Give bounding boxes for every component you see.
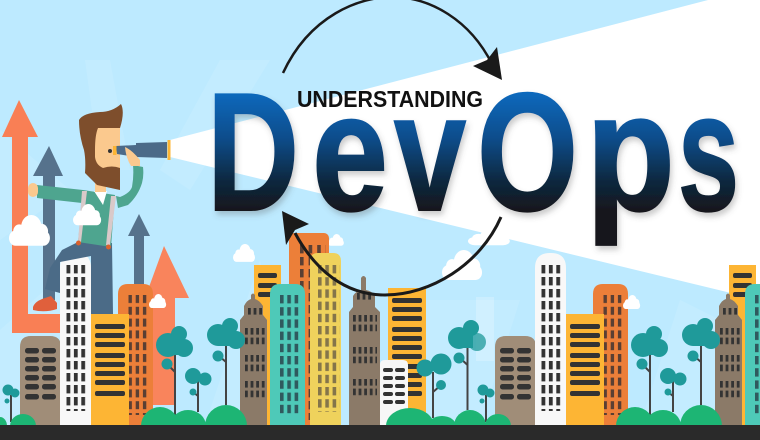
cityscape, second repeat bbox=[468, 233, 760, 440]
cityscape, first repeat bbox=[0, 233, 486, 440]
shoe bbox=[33, 296, 57, 311]
ground strip bbox=[0, 425, 760, 440]
neck bbox=[95, 180, 106, 192]
hand bbox=[28, 183, 38, 197]
title: DevOps: p bbox=[586, 58, 675, 246]
title: DevOps: v bbox=[394, 58, 466, 246]
suspenders bbox=[78, 191, 116, 245]
arrow: large orange L-shaped arrow bbox=[2, 100, 60, 333]
character: man with telescope bbox=[28, 104, 170, 314]
shirt and arm pointing left bbox=[37, 185, 115, 247]
clouds around the character bbox=[9, 204, 640, 309]
heading: UNDERSTANDING: UNDERSTANDING bbox=[297, 86, 483, 112]
cycle arrow: top bbox=[283, 0, 502, 80]
light beam from telescope bbox=[170, 0, 760, 300]
collar bbox=[94, 191, 107, 205]
title: DevOps: D bbox=[207, 58, 299, 246]
arrow: orange arrow behind tower bbox=[140, 246, 189, 405]
arrow: dark slate arrow right bbox=[128, 214, 150, 290]
raised arm bbox=[116, 165, 143, 208]
eye bbox=[108, 149, 112, 153]
hair and beard bbox=[79, 104, 123, 190]
title: DevOps: O bbox=[477, 58, 578, 246]
legs and pants bbox=[45, 242, 113, 314]
clouds behind the city bbox=[233, 229, 510, 280]
cycle arrow: bottom bbox=[282, 211, 501, 295]
arrow: dark slate arrow left bbox=[33, 146, 63, 300]
faint background building bbox=[476, 297, 494, 361]
telescope bbox=[116, 142, 167, 158]
hand on telescope bbox=[125, 147, 140, 166]
title: DevOps: e bbox=[312, 58, 388, 246]
face bbox=[95, 126, 120, 172]
